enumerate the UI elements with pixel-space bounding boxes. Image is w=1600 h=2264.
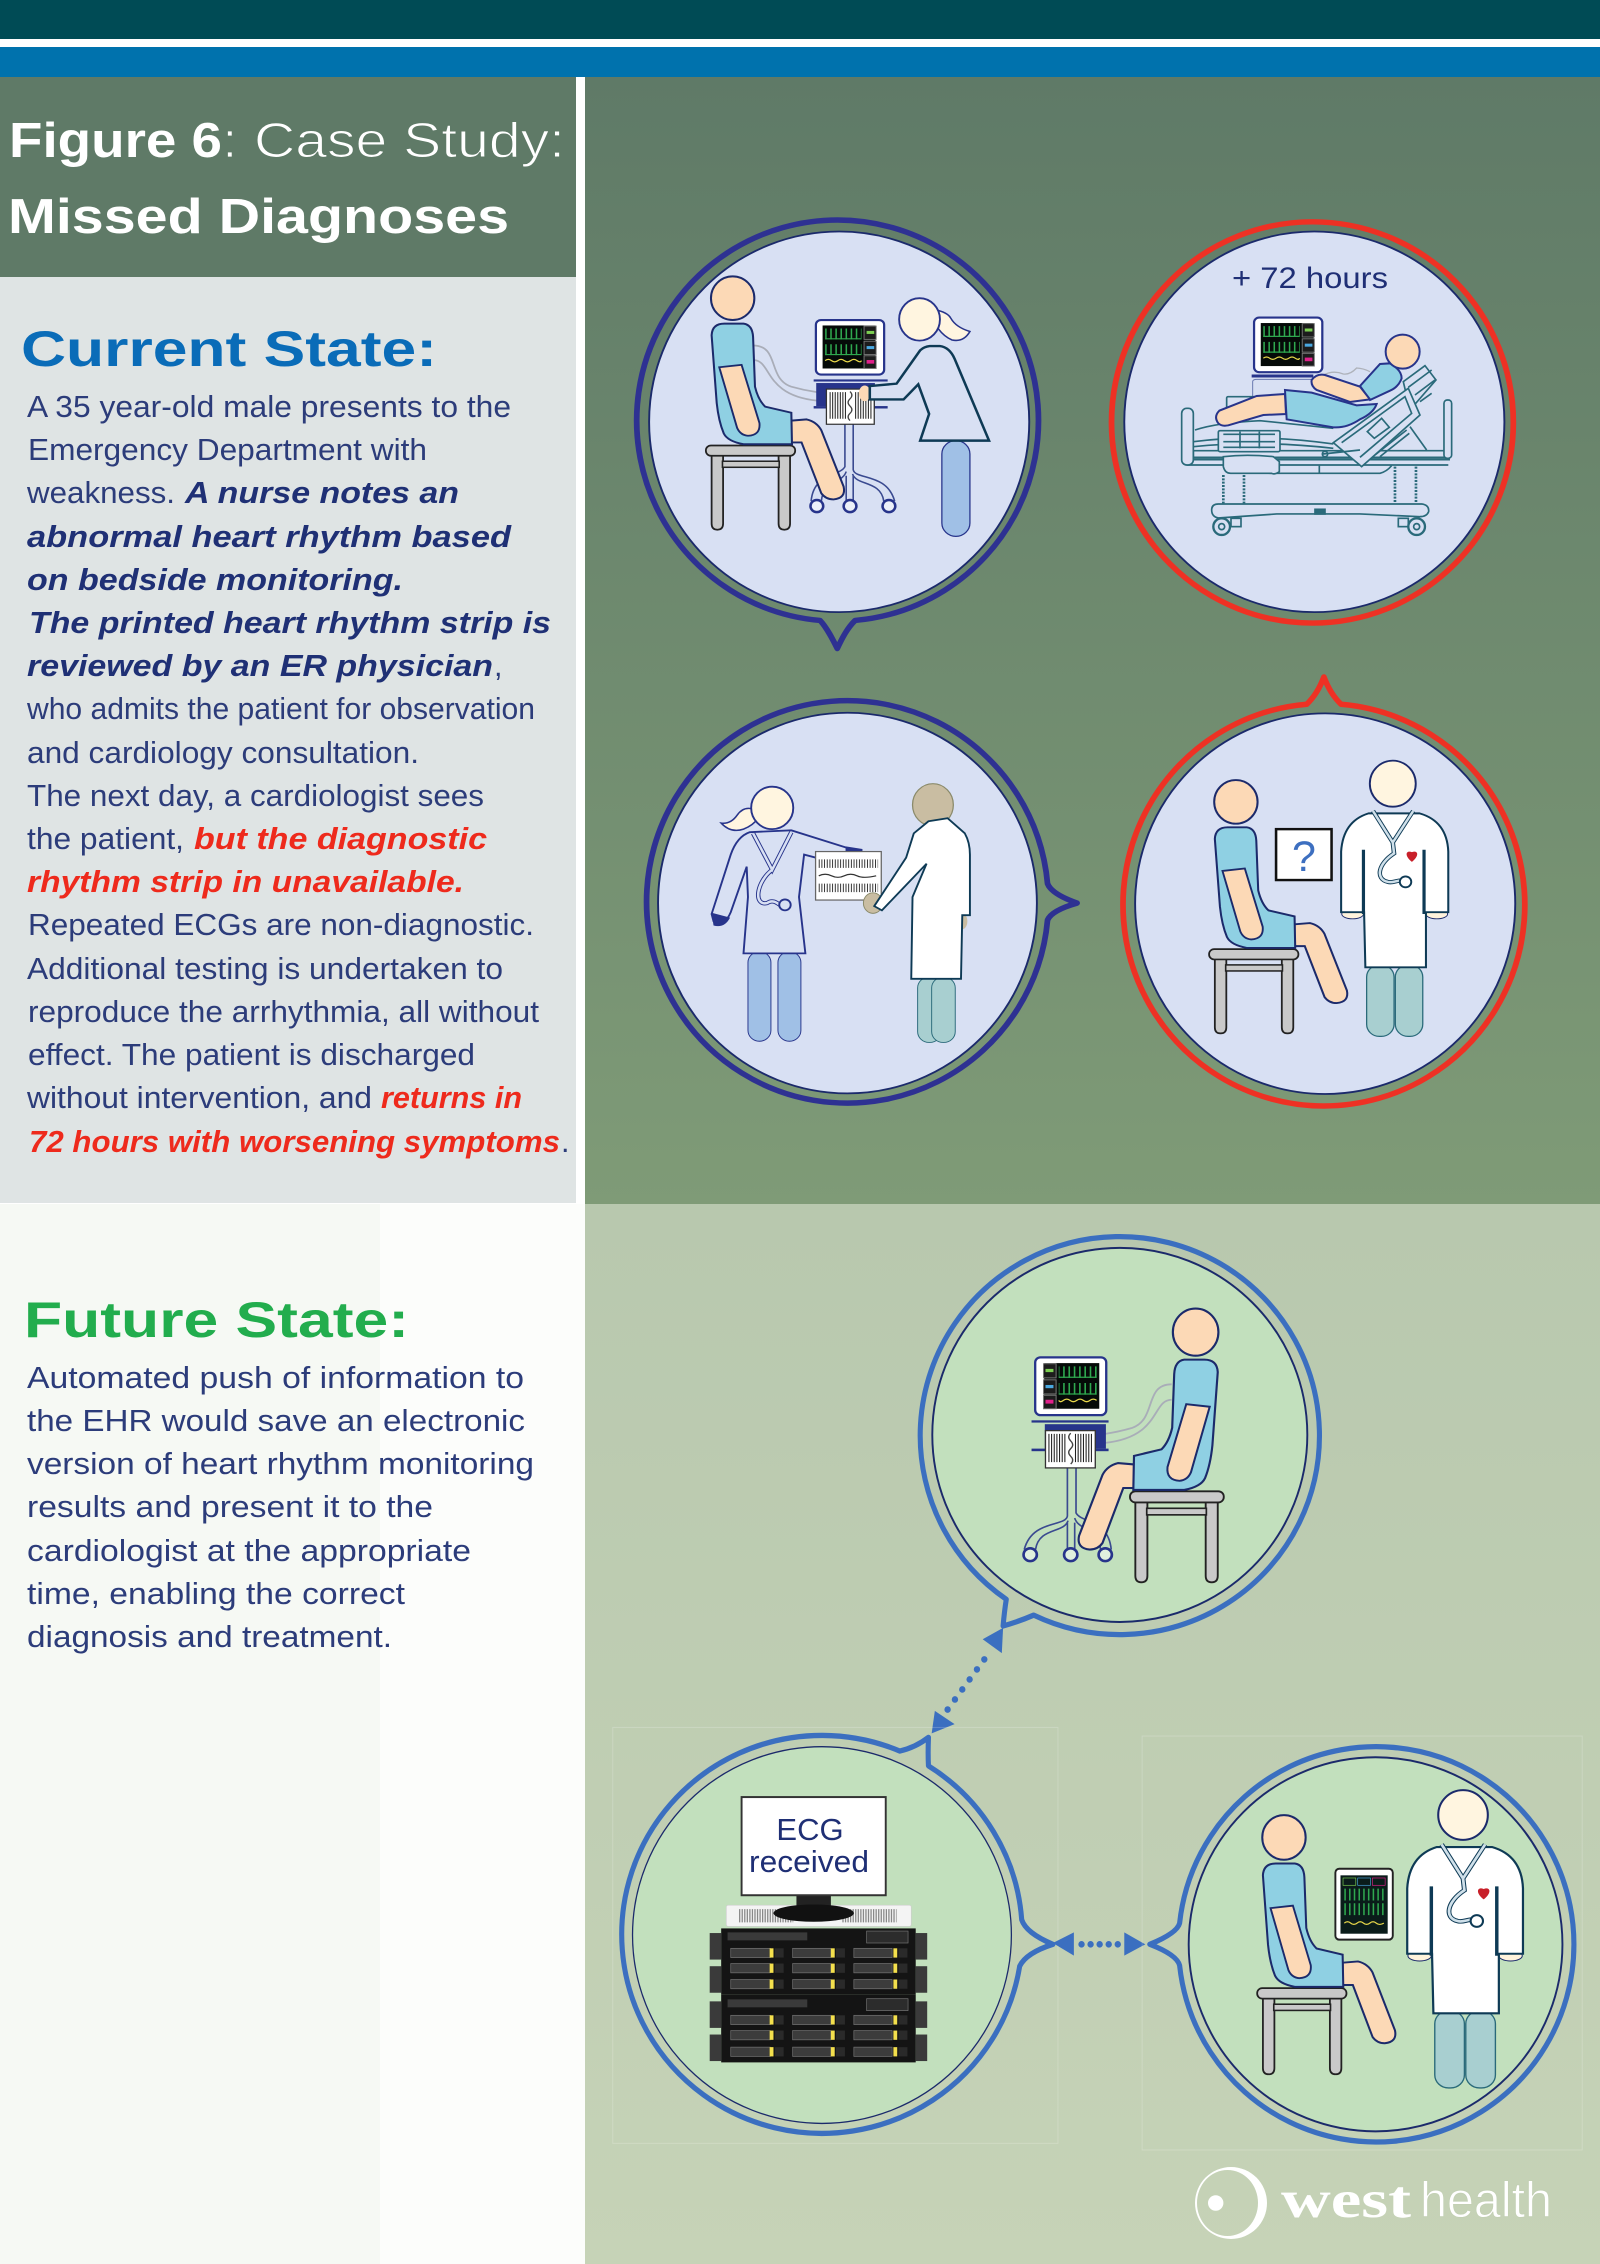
body: future state paragraph [27,1361,534,1654]
body: current state paragraph: rhythm strip in unavailable. [27,864,464,899]
label: + 72 hours: + 72 hours [1232,262,1388,295]
body: current state paragraph: reproduce the arrhythmia, all without [28,995,540,1029]
body: current state paragraph: 72 hours with worsening symptoms [29,1124,560,1159]
body: current state paragraph: but the diagnostic [194,821,487,856]
body: current state paragraph: and cardiology consultation. [27,736,419,770]
body: current state paragraph [26,390,569,1159]
body: future state paragraph: version of heart rhythm monitoring [27,1447,534,1481]
body: future state paragraph: the EHR would save an electronic [27,1404,525,1438]
arrow: server to cardiologist [1053,1932,1145,1956]
title panel [0,77,576,277]
heading: current state: Current State: [21,321,437,377]
label: ECG received: received [749,1844,869,1879]
body: future state paragraph: time, enabling the correct [27,1577,406,1611]
body: current state paragraph: reviewed by an ER physician [27,648,493,683]
label: question mark: ? [1292,833,1316,881]
panel: future state text [24,1292,534,1654]
title panel: Figure 6 [9,114,222,168]
label: ECG received: ECG [776,1812,844,1847]
panel: cardiologist reviews ECG on tablet [1142,1736,1582,2150]
panel: nurse notes abnormal rhythm (bubble with tail) [637,220,1038,649]
body: current state paragraph: who admits the patient for observation [26,692,535,726]
body: future state paragraph: cardiologist at the appropriate [27,1534,471,1568]
panel: server receives ECG [613,1727,1058,2143]
title panel: Missed Diagnoses [8,190,509,244]
panel: nurse hands strip to physician [647,701,1077,1103]
arrow: patient to server [932,1628,1003,1733]
server rack [710,1895,927,2062]
body: current state paragraph: abnormal heart rhythm based [27,519,512,554]
body: current state paragraph: A 35 year-old male presents to the [27,390,511,424]
title panel: Case Study: [254,114,565,168]
body: current state paragraph: . [561,1125,569,1159]
panel: patient on automated monitor [920,1237,1319,1635]
label: ECG received [749,1812,869,1879]
body: current state paragraph: without intervention, and [26,1081,372,1115]
body: current state paragraph: A nurse notes an [184,475,459,510]
title panel: : [223,114,237,168]
body: current state paragraph: Emergency Department with [28,433,427,467]
logo: westhealth [1195,2167,1552,2239]
body: current state paragraph: , [494,649,502,683]
body: future state paragraph: results and present it to the [27,1490,433,1524]
logo: westhealth: west [1281,2171,1411,2229]
logo: westhealth: health [1420,2172,1552,2228]
body: current state paragraph: The printed heart rhythm strip is [29,605,551,640]
body: current state paragraph: returns in [381,1080,522,1115]
body: current state paragraph: Repeated ECGs are non-diagnostic. [28,908,534,942]
body: future state paragraph: diagnosis and treatment. [27,1620,392,1654]
body: future state paragraph: Automated push of information to [27,1361,524,1395]
panel: patient returns in bed after 72 hours [1112,222,1513,623]
panel: current state text [0,277,576,1203]
body: current state paragraph: The next day, a cardiologist sees [27,779,484,813]
body: current state paragraph: Additional testing is undertaken to [27,952,503,986]
body: current state paragraph: on bedside monitoring. [27,562,403,597]
body: current state paragraph: the patient, [27,822,184,856]
body: current state paragraph: weakness. [26,476,175,510]
panel: cardiologist cannot find strip [1123,677,1525,1106]
heading: future state: Future State: [24,1292,409,1348]
hospital bed with patient [1182,335,1452,535]
body: current state paragraph: effect. The patient is discharged [28,1038,475,1072]
top banner [0,0,1600,77]
icon: tablet with ECG [1335,1869,1393,1940]
